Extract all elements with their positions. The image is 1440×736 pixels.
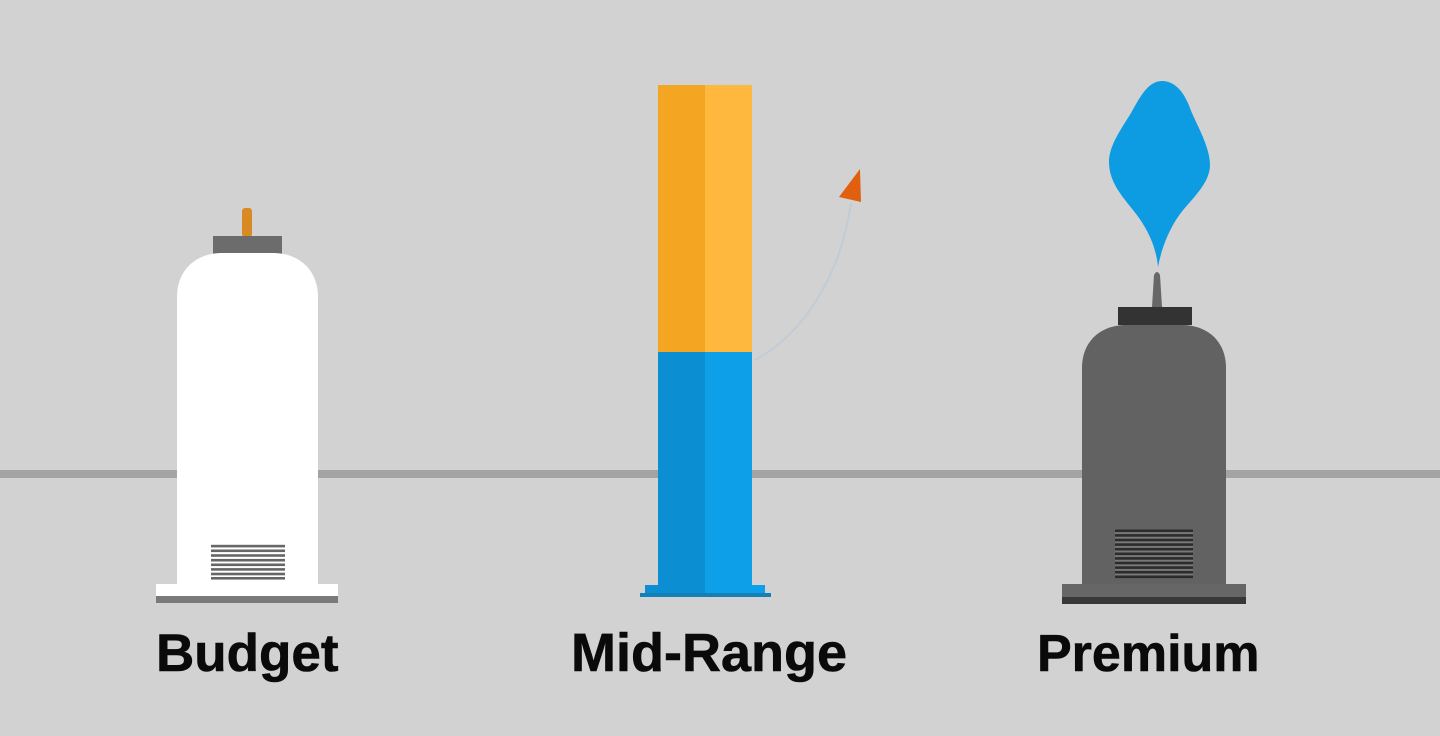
device: budget — [156, 208, 338, 603]
budget pin — [242, 208, 252, 237]
premium body — [1082, 325, 1226, 584]
icon: blue droplet — [1109, 81, 1210, 267]
mid-range blue lower column — [658, 352, 752, 586]
premium vent — [1115, 530, 1193, 578]
mid-range orange upper column — [658, 85, 752, 352]
label: Mid-Range: Mid-Range — [571, 623, 847, 683]
label: Premium: Premium — [1037, 625, 1260, 683]
budget vent — [211, 545, 285, 580]
label: Budget: Budget — [156, 624, 339, 683]
premium nozzle — [1152, 272, 1162, 307]
budget cap — [213, 236, 282, 254]
device: mid-range — [640, 85, 861, 597]
premium base — [1062, 584, 1246, 604]
budget base — [156, 584, 338, 603]
device: premium — [1062, 81, 1246, 604]
premium cap — [1118, 307, 1192, 325]
mid-range base — [640, 585, 771, 597]
budget body — [177, 253, 318, 584]
arrow: rising curve — [755, 169, 861, 360]
